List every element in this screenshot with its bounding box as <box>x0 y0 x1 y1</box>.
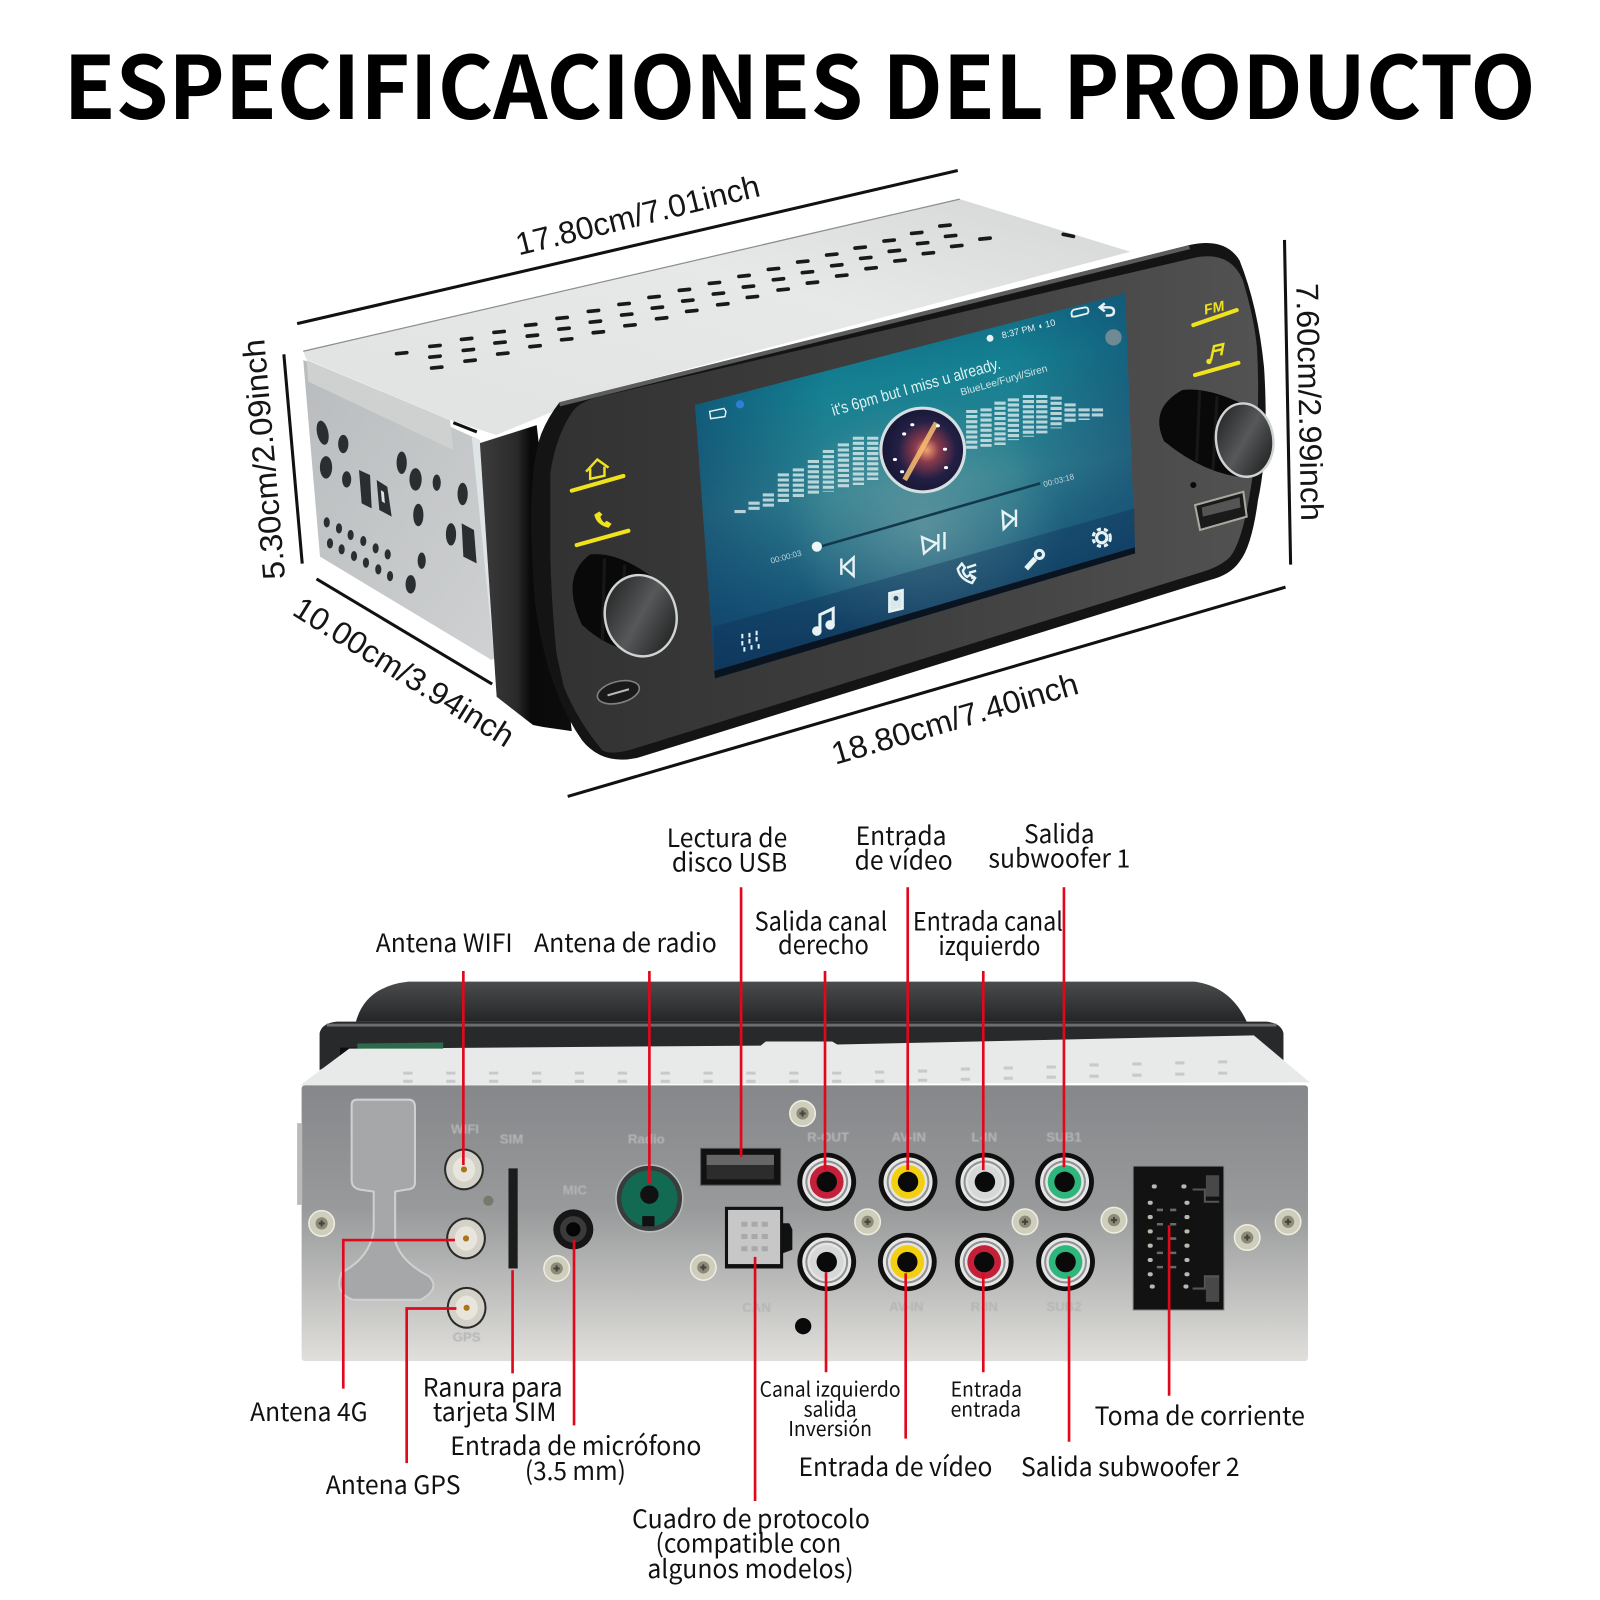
RCA jacks <box>797 1153 1095 1291</box>
rear product view <box>297 982 1310 1361</box>
label: Canal izquierdo salida Inversión: salida <box>804 1393 857 1423</box>
label: Toma de corriente: Toma de corriente <box>1095 1396 1305 1433</box>
label: Canal izquierdo salida Inversión: Canal izquierdo <box>760 1372 901 1402</box>
silkscreen port names: L-IN <box>971 1130 997 1145</box>
dimension: 18.80cm width: 18.80cm/7.40inch <box>827 665 1082 772</box>
label: Salida canal derecho: derecho <box>778 925 869 962</box>
front panel <box>531 243 1266 760</box>
right knob <box>1159 389 1278 480</box>
label: Cuadro de protocolo: (compatible con <box>656 1524 841 1561</box>
silkscreen port names <box>451 1121 1082 1345</box>
label: Lectura de disco USB: Lectura de <box>667 818 787 855</box>
power connector <box>1133 1166 1224 1310</box>
label: Entrada canal izquierdo: Entrada canal <box>913 902 1063 939</box>
label: Entrada canal izquierdo: izquierdo <box>938 926 1040 963</box>
silkscreen port names: Radio <box>628 1132 665 1147</box>
label: Entrada canal izquierdo <box>913 902 1063 963</box>
label: Lectura de disco USB <box>667 818 787 879</box>
status bar: 8:37 PM ◖ 10 <box>1001 317 1056 340</box>
microphone jack <box>553 1209 593 1249</box>
label: Lectura de disco USB: disco USB <box>672 842 787 879</box>
vent dots <box>403 1062 1227 1081</box>
protocol connector <box>725 1207 792 1268</box>
label: Salida canal derecho: Salida canal <box>755 902 887 939</box>
label: Salida subwoofer 1: Salida <box>1024 814 1095 851</box>
equalizer bars <box>740 395 1097 515</box>
label: Ranura para tarjeta SIM: Ranura para <box>423 1367 563 1404</box>
label: Ranura para tarjeta SIM: tarjeta SIM <box>433 1392 556 1429</box>
screen indicators <box>736 329 1122 408</box>
dimension: 10.00cm depth: 10.00cm/3.94inch <box>287 589 521 754</box>
label: Antena WIFI: Antena WIFI <box>376 923 513 960</box>
progress bar: 00:00:03 <box>770 549 803 566</box>
album disc <box>879 407 966 493</box>
label: Entrada de vídeo top: de vídeo <box>855 840 953 877</box>
label: Canal izquierdo salida Inversión <box>760 1372 901 1442</box>
silkscreen port names: MIC <box>563 1183 587 1198</box>
silkscreen port names: R-OUT <box>807 1130 849 1145</box>
SIM slot <box>508 1168 518 1268</box>
label: Entrada de vídeo bottom: Entrada de vídeo <box>798 1447 992 1484</box>
USB port and mic <box>1190 482 1247 530</box>
top metal face <box>303 199 1130 435</box>
yellow touch icons <box>572 298 1238 545</box>
screen <box>695 293 1135 678</box>
song artist: BlueLee/Furyl/Siren <box>959 363 1049 399</box>
label: Cuadro de protocolo: algunos modelos) <box>647 1549 854 1586</box>
silkscreen port names: AV-IN <box>889 1299 923 1314</box>
label: Entrada entrada: Entrada <box>951 1372 1022 1402</box>
side flange <box>480 425 572 731</box>
dimension: 17.80cm width: 17.80cm/7.01inch <box>512 168 763 262</box>
silkscreen port names: R-IN <box>971 1299 998 1314</box>
silkscreen port names: GPS <box>453 1330 481 1345</box>
song title: it's 6pm but I miss u already. <box>830 355 1003 420</box>
silkscreen port names: SUB2 <box>1046 1299 1082 1314</box>
progress bar <box>770 472 1076 566</box>
dimension: 5.30cm height: 5.30cm/2.09inch <box>235 338 292 581</box>
dimension: 17.80cm width <box>297 168 958 324</box>
red callout lines <box>343 887 1169 1501</box>
antenna connectors <box>444 1148 487 1329</box>
yellow touch icons: FM <box>1202 298 1227 319</box>
left knob <box>573 554 684 663</box>
title: ESPECIFICACIONES DEL PRODUCTO <box>64 18 1535 144</box>
silkscreen port names: AV-IN <box>892 1130 926 1145</box>
silkscreen port names: 4G <box>458 1261 475 1276</box>
silkscreen port names: WIFI <box>451 1121 479 1136</box>
label: Canal izquierdo salida Inversión: Inversión <box>788 1412 872 1442</box>
label: Ranura para tarjeta SIM <box>423 1367 563 1429</box>
dimension: 7.60cm height <box>1284 240 1330 565</box>
label: Entrada de vídeo top <box>855 816 953 877</box>
label: Salida subwoofer 1 <box>988 814 1130 875</box>
label: Salida subwoofer 1: subwoofer 1 <box>988 838 1130 875</box>
rear housing <box>297 982 1310 1361</box>
side metal face with holes <box>303 360 502 660</box>
silkscreen port names: SIM <box>500 1132 523 1147</box>
label: Entrada de micrófono: (3.5 mm) <box>525 1451 626 1488</box>
label: Salida canal derecho <box>755 902 887 962</box>
silkscreen port names: SUB1 <box>1046 1130 1082 1145</box>
label: Antena de radio: Antena de radio <box>534 923 717 960</box>
label: Entrada entrada: entrada <box>951 1393 1021 1423</box>
USB socket <box>701 1148 781 1185</box>
screws <box>309 1101 1301 1334</box>
progress bar: 00:03:18 <box>1042 472 1076 489</box>
front product view <box>303 199 1278 760</box>
label: Entrada entrada <box>951 1372 1022 1423</box>
label: Entrada de vídeo top: Entrada <box>856 816 947 853</box>
label: Antena 4G: Antena 4G <box>250 1392 368 1429</box>
USB-C port <box>595 677 642 708</box>
label: Salida subwoofer 2: Salida subwoofer 2 <box>1021 1447 1240 1484</box>
media and dock icons <box>710 303 1114 649</box>
label: Cuadro de protocolo <box>632 1499 870 1586</box>
radio antenna socket <box>616 1165 683 1232</box>
label: Entrada de micrófono: Entrada de micrófono <box>450 1426 701 1463</box>
label: Antena GPS: Antena GPS <box>326 1465 460 1502</box>
silkscreen port names: CAN <box>742 1300 771 1315</box>
dimension: 7.60cm height: 7.60cm/2.99inch <box>1289 283 1330 521</box>
label: Cuadro de protocolo: Cuadro de protocolo <box>632 1499 870 1536</box>
dimension: 18.80cm width <box>568 587 1286 796</box>
label: Entrada de micrófono <box>450 1426 701 1488</box>
